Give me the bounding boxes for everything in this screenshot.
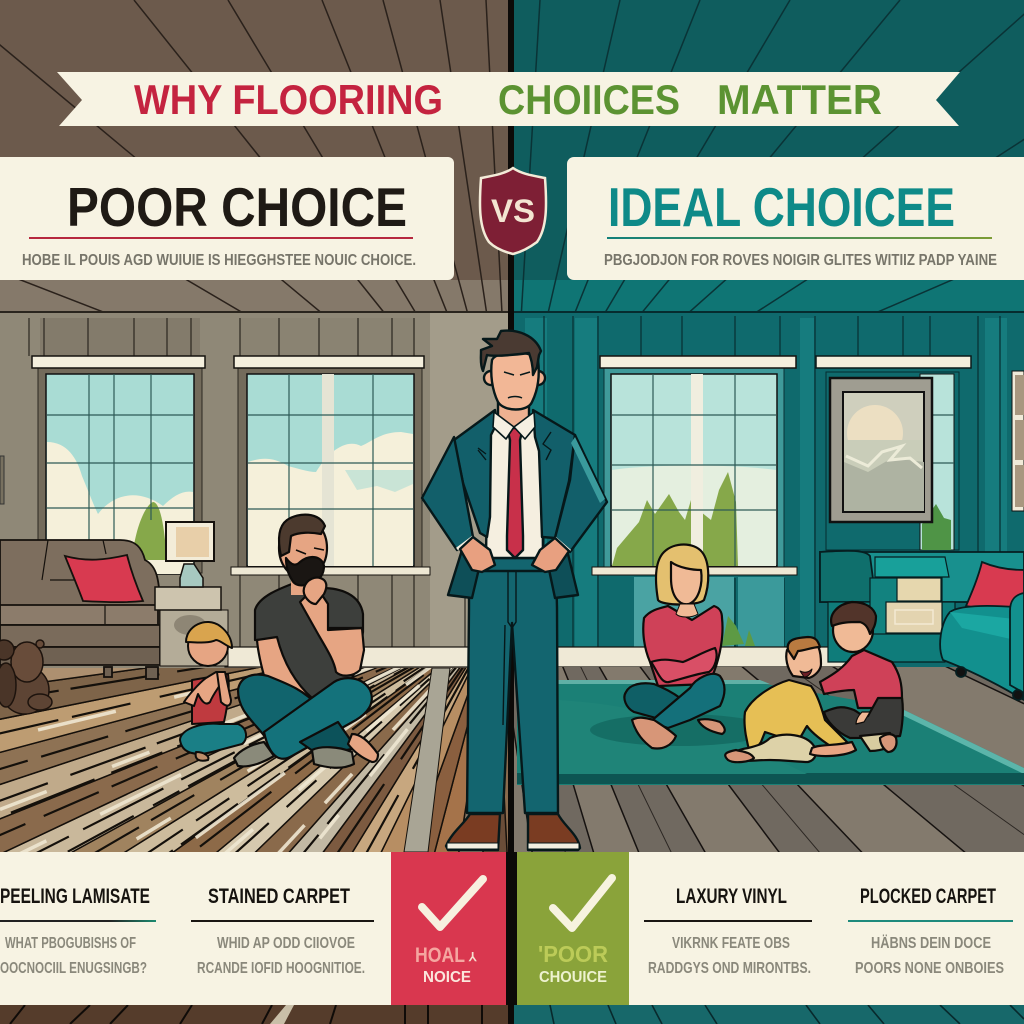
window 1 <box>32 356 205 574</box>
material: peeling laminate: WHAT PBOGUBISHS OF <box>5 935 136 952</box>
material: luxury vinyl <box>644 885 812 977</box>
panel: poor materials <box>0 852 391 1005</box>
material: peeling laminate <box>0 885 156 977</box>
jacket torso left <box>454 410 497 537</box>
material: luxury vinyl: LAXURY VINYL <box>676 885 787 908</box>
title left: WHY FLOORIING <box>134 76 443 123</box>
material: peeling laminate: OOCNOCIIL ENUGSINGB? <box>0 960 147 977</box>
head and hair <box>481 331 545 428</box>
lamp and side table <box>155 522 228 666</box>
jacket torso right <box>533 410 575 538</box>
heading: POOR CHOICE <box>67 176 407 238</box>
left ceiling <box>0 0 508 313</box>
baseboard right <box>513 647 848 667</box>
badge: green check: 'POOR <box>538 941 608 967</box>
boy, left <box>180 622 246 761</box>
child in yellow sweater <box>725 637 856 762</box>
central divider <box>508 0 514 1024</box>
right teal furniture <box>820 551 1024 700</box>
red cushion <box>966 562 1024 616</box>
title right end: MATTER <box>717 76 882 123</box>
material: stained carpet: STAINED CARPET <box>208 885 350 908</box>
far right picture <box>1012 371 1024 511</box>
divider between badges <box>506 852 517 1005</box>
window 2 <box>231 356 430 575</box>
bottom strip left <box>0 1005 509 1024</box>
badge: red check: HOAL <box>415 944 465 967</box>
material: stained carpet: RCANDE IOFID HOOGNITIOE. <box>197 960 365 977</box>
hands <box>460 537 495 572</box>
collar <box>493 412 535 439</box>
baseboard left <box>225 647 510 667</box>
subtitle: HOBE IL POUIS AGD WUIUIE IS HIEGGHSTEE NOUIC CHOICE. <box>22 252 416 269</box>
left wall <box>0 313 509 669</box>
raised arm <box>300 586 364 676</box>
material: peeling laminate: PEELING LAMISATE <box>0 885 150 908</box>
jeans <box>238 675 318 744</box>
window 3 <box>592 356 797 575</box>
right wall <box>513 313 1024 669</box>
jacket tails <box>448 550 578 598</box>
hair <box>656 544 708 604</box>
panel: ideal choice <box>567 157 1024 280</box>
picture frame <box>830 378 932 522</box>
teddy bear <box>0 640 52 714</box>
material: plocked carpet <box>848 885 1013 977</box>
material: stained carpet: WHID AP ODD CIIOVOE <box>217 935 355 952</box>
badge: red check: NOICE <box>423 969 471 986</box>
vs shield: VS <box>491 193 535 229</box>
right ceiling <box>514 0 1024 313</box>
hand at chin <box>304 578 326 604</box>
badge: red check: ⅄ <box>468 950 477 964</box>
rug <box>517 680 1024 785</box>
material: plocked carpet: HÄBNS DEIN DOCE <box>871 934 991 952</box>
icon: check <box>553 878 612 928</box>
bottom strip right <box>513 1005 1024 1024</box>
material: luxury vinyl: RADDGYS OND MIRONTBS. <box>648 960 811 977</box>
trousers <box>467 558 558 813</box>
poor floor: damaged planks <box>0 668 508 852</box>
head <box>279 518 327 578</box>
badge: green check <box>517 852 629 1005</box>
sofa left <box>0 540 160 679</box>
ideal floor: grey planks <box>514 667 1024 852</box>
woman <box>624 544 725 748</box>
shoes <box>446 814 580 850</box>
material: stained carpet <box>191 885 374 977</box>
face <box>671 562 702 604</box>
badge: red check <box>391 852 506 1005</box>
badge: green check: CHOUICE <box>539 969 607 986</box>
t-shirt <box>255 582 363 701</box>
icon: check <box>422 879 483 927</box>
material: luxury vinyl: VIKRNK FEATE OBS <box>672 935 790 952</box>
red cushion <box>65 555 143 602</box>
title right: CHOIICES <box>498 76 680 123</box>
sweater <box>643 606 723 686</box>
panel: ideal materials <box>629 852 1024 1005</box>
vs shield <box>480 168 546 254</box>
man: father, seated <box>234 515 378 768</box>
panel: poor choice <box>0 157 454 280</box>
standing man in suit <box>422 331 607 850</box>
shirt <box>486 418 543 558</box>
title banner <box>57 72 960 126</box>
near arm <box>257 637 318 721</box>
tie <box>507 428 523 558</box>
child in red sweater <box>820 602 903 752</box>
sleeves <box>422 437 473 550</box>
window 4 with hanging picture <box>816 356 971 550</box>
legs <box>624 683 680 718</box>
teal sofa <box>940 606 1024 700</box>
socks <box>234 742 274 766</box>
